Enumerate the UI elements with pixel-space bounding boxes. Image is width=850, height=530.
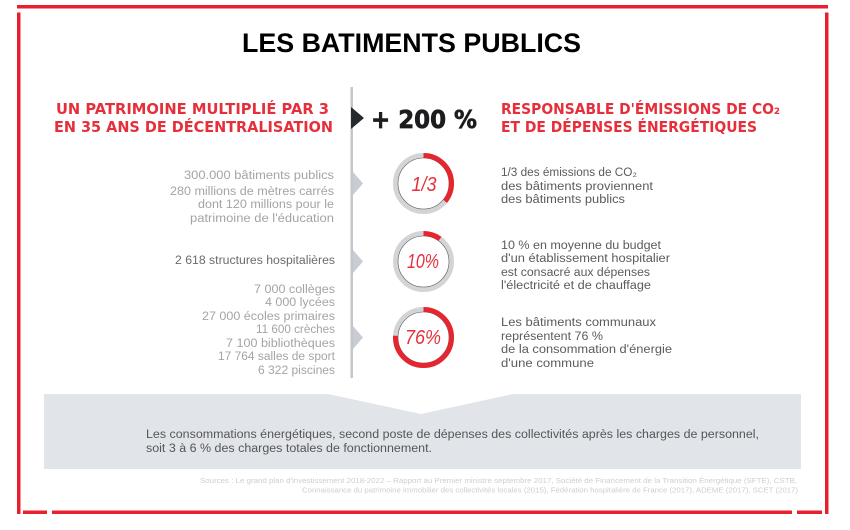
text block: municipal buildings: de la consommation d'énergie [501,344,672,356]
donut: 76 %: 76% [405,327,441,349]
heading: left column: UN PATRIMOINE MULTIPLIÉ PAR 3 [56,99,329,118]
sources: Connaissance du patrimoine immobilier des collectivités locales (2015), Fédération hospitalière de France (2017), ADEME (2017), SCET (2017) [302,486,799,494]
donut: 1/3 [396,156,452,212]
text block: buildings [170,170,334,225]
text block: hospital budget: 10 % en moyenne du budget [501,240,662,252]
heading: right column: RESPONSABLE D'ÉMISSIONS DE CO₂ [501,99,780,118]
text block: CO2 share: des bâtiments publics [501,194,625,206]
text block: facilities list [202,284,336,377]
callout panel [44,394,801,469]
heading: right column: ET DE DÉPENSES ÉNERGÉTIQUES [501,117,757,136]
text block: buildings: dont 120 millions pour le [198,199,334,211]
donut: 1/3: 1/3 [412,174,436,196]
text block: municipal buildings: Les bâtiments communaux [501,317,656,329]
heading: left column [54,99,333,136]
text block: facilities list: 11 600 crèches [256,324,335,336]
text block: buildings: 280 millions de mètres carrés [170,186,334,198]
sources: Sources : Le grand plan d'investissement 2018-2022 – Rapport au Premier ministre septembre 2017, Société de Financement de la Transition Énergétique (SFTE), CSTB, [200,476,797,485]
text block: facilities list: 17 764 salles de sport [218,351,336,363]
donut: 76 % [396,310,452,366]
text block: CO2 share: des bâtiments proviennent [501,181,654,193]
text block: hospital budget: l'électricité et de chauffage [501,280,651,292]
text block: buildings: 300.000 bâtiments publics [184,170,334,182]
heading: right column [501,99,780,136]
callout panel: Les consommations énergétiques, second poste de dépenses des collectivités après les charges de personnel, [146,429,759,441]
text block: municipal buildings [501,317,672,370]
donut: 10 % [396,234,452,290]
text block: facilities list: 7 000 collèges [254,284,335,296]
sources [200,476,799,494]
text block: facilities list: 7 100 bibliothèques [226,338,335,350]
donut: 10 %: 10% [407,251,439,273]
text block: hospital budget [501,240,670,292]
text block: facilities list: 6 322 piscines [258,365,335,377]
central axis with markers [350,87,364,378]
text block: CO2 share: 1/3 des émissions de CO₂ [501,167,637,179]
text block: municipal buildings: représentent 76 % [501,331,603,343]
title: LES BATIMENTS PUBLICS [242,28,581,58]
key figure: +200 %: + 200 % [371,105,477,134]
text block: facilities list: 27 000 écoles primaires [202,311,335,323]
callout panel: soit 3 à 6 % des charges totales de fonctionnement. [146,443,432,455]
text block: municipal buildings: d'une commune [501,358,594,370]
text block: buildings: patrimoine de l'éducation [190,213,334,225]
text block: facilities list: 4 000 lycées [265,297,335,309]
text block: hospitals: 2 618 structures hospitalières [175,255,335,267]
heading: left column: EN 35 ANS DE DÉCENTRALISATION [54,117,333,136]
text block: hospital budget: d'un établissement hospitalier [501,253,670,265]
text block: hospital budget: est consacré aux dépenses [501,267,650,279]
text block: CO2 share [501,167,654,206]
